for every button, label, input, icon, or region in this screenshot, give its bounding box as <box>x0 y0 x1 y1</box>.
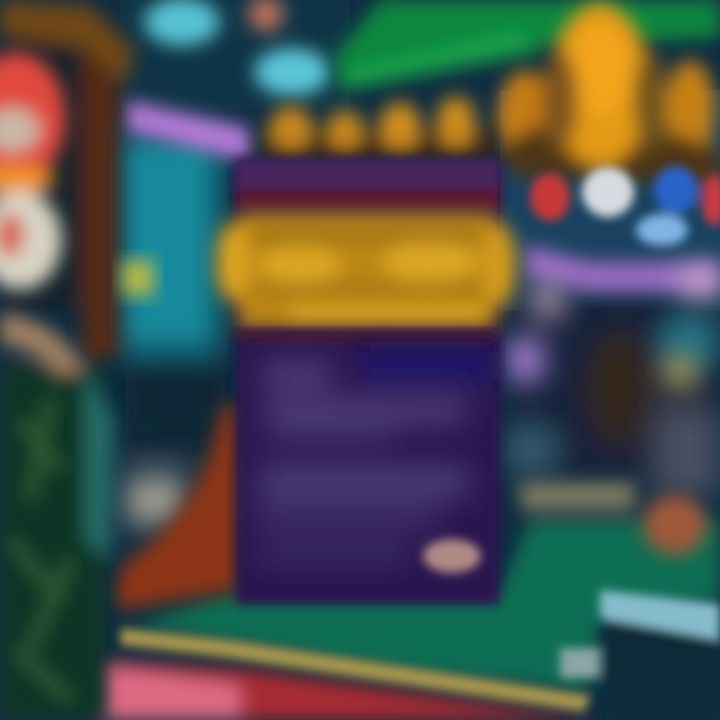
background: teal wall column <box>118 135 225 525</box>
poster body <box>236 160 500 605</box>
poster header band <box>236 160 500 210</box>
gold crown ornament <box>497 3 720 185</box>
green roof <box>335 0 720 90</box>
heading: gold title band <box>216 212 516 328</box>
wooden barrel on right <box>643 495 707 555</box>
right dark crowd <box>502 295 720 495</box>
purple ribbon right <box>525 245 720 292</box>
brown curved banister <box>115 405 240 610</box>
left green plant <box>0 312 115 720</box>
yellow glow on teal <box>122 260 154 296</box>
text block: body lines <box>258 352 490 561</box>
golden coin row <box>262 96 497 160</box>
right bottom dark panel <box>560 590 720 720</box>
poster corner badge <box>423 539 481 573</box>
small crowd highlights <box>505 266 720 388</box>
gold band lower edge <box>238 330 496 342</box>
purple ribbon left <box>125 100 250 162</box>
bottom red carpet <box>100 660 600 720</box>
coloured balls <box>530 166 720 246</box>
gold table edge <box>120 628 590 712</box>
green table floor <box>130 482 720 690</box>
left circular signs <box>0 52 66 290</box>
panel: main poster <box>216 160 516 605</box>
top teal lights <box>144 0 330 96</box>
left wooden frame <box>0 0 135 360</box>
